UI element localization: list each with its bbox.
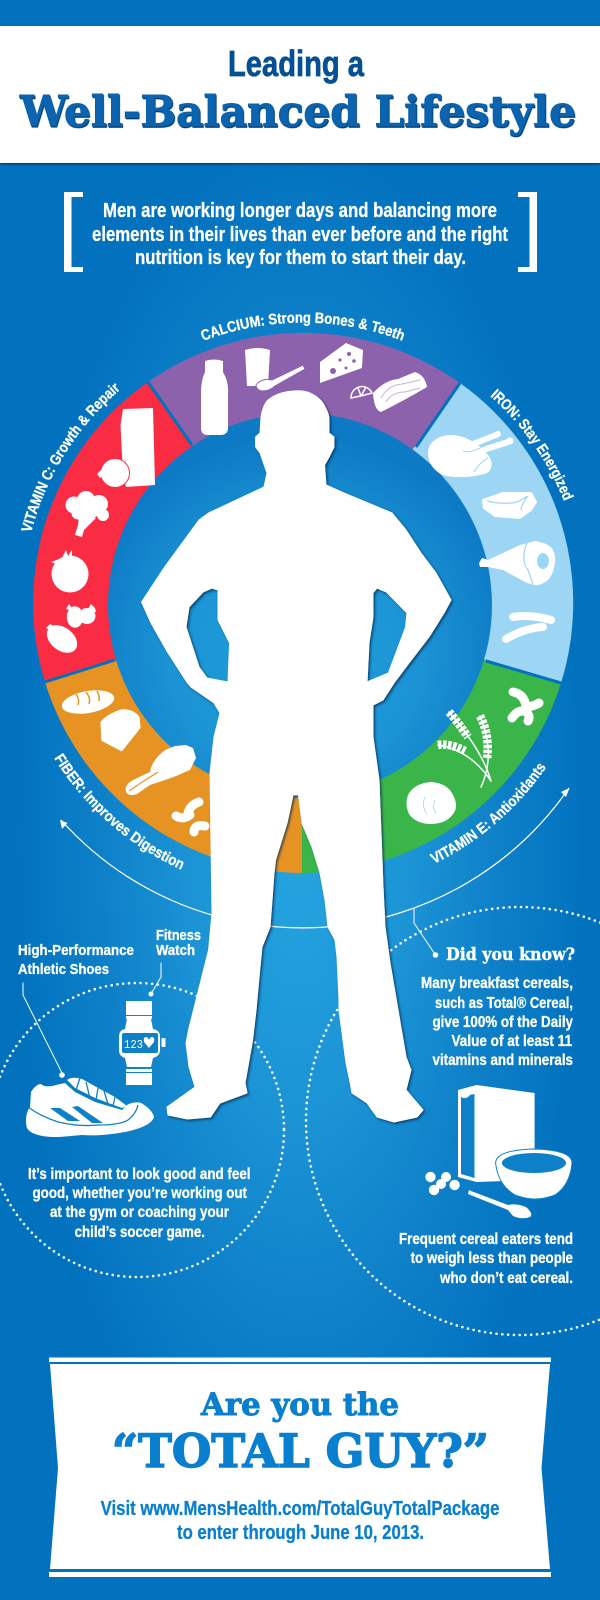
label: athletic shoes: High-Performance xyxy=(18,942,134,959)
left paragraph xyxy=(28,1166,250,1241)
dotted circle right xyxy=(306,907,600,1335)
left paragraph: It’s important to look good and feel xyxy=(28,1166,250,1183)
callout: athletic shoes xyxy=(18,942,154,1137)
leader line: watch xyxy=(151,963,161,994)
left paragraph: good, whether you’re working out xyxy=(32,1185,247,1202)
label: athletic shoes: Athletic Shoes xyxy=(18,961,109,978)
title line one: Leading a xyxy=(228,43,365,84)
icon: cheese xyxy=(320,343,363,383)
icon: baguette xyxy=(60,687,116,717)
intro text xyxy=(92,200,508,269)
left bracket xyxy=(64,192,83,272)
icons: vitamin C foods xyxy=(42,408,155,659)
title band xyxy=(0,26,600,163)
icon: strawberries xyxy=(42,604,96,659)
call to action text: to enter through June 10, 2013. xyxy=(177,1522,424,1544)
segment: iron xyxy=(303,383,573,683)
call to action text: Visit www.MensHealth.com/TotalGuyTotalPackage xyxy=(101,1498,499,1520)
icon: fish fillet xyxy=(373,372,427,412)
label: athletic shoes xyxy=(18,942,134,978)
fact text: give 100% of the Daily xyxy=(432,1014,573,1031)
icon: spoon xyxy=(468,1190,531,1218)
heading line one: Are you the xyxy=(200,1387,399,1423)
icons: vitamin E foods xyxy=(406,692,539,824)
heading: did you know: Did you know? xyxy=(446,945,575,964)
icon: broccoli xyxy=(66,491,109,537)
intro text: elements in their lives than ever before and the right xyxy=(92,224,508,246)
icon: wheat xyxy=(438,712,491,787)
icon: sausages xyxy=(506,616,551,639)
intro quote with brackets xyxy=(64,192,537,272)
fact text: Many breakfast cereals, xyxy=(421,975,573,992)
label: fitness watch xyxy=(156,927,201,959)
segment: calcium xyxy=(148,333,460,603)
call to action panel xyxy=(49,1358,551,1577)
inner disc xyxy=(108,413,492,797)
icon: cereal box xyxy=(458,1085,535,1182)
callout: fitness watch xyxy=(119,927,201,1085)
icons: calcium foods xyxy=(201,343,427,435)
icon: bread loaf xyxy=(100,709,141,752)
fact text xyxy=(421,975,573,1069)
label: iron: IRON: Stay Energized xyxy=(490,388,574,501)
icon: nuts xyxy=(176,802,205,832)
label: vitamin C: VITAMIN C: Growth & Repair xyxy=(20,383,119,530)
icon: spoon xyxy=(256,365,305,391)
label: vitamin E: VITAMIN E: Antioxidants xyxy=(429,764,546,863)
leader line xyxy=(414,908,436,955)
heading line two: “TOTAL GUY?” xyxy=(112,1424,489,1478)
icon: cabbage xyxy=(406,782,456,824)
fact text: such as Total® Cereal, xyxy=(435,995,573,1012)
icon: lime wedge xyxy=(351,387,372,398)
icons: fiber foods xyxy=(60,687,205,832)
icon: tomato xyxy=(51,550,88,592)
icon: glass xyxy=(245,348,270,386)
label: calcium: CALCIUM: Strong Bones & Teeth xyxy=(201,312,404,341)
icon: bowl xyxy=(496,1149,572,1199)
dotted circle left xyxy=(0,983,284,1277)
icon: shoe xyxy=(26,1078,154,1137)
icon: steak xyxy=(483,493,536,518)
label: fitness watch: Watch xyxy=(156,942,195,959)
icon: orange xyxy=(97,458,130,488)
label: fiber: FIBER: Improves Digestion xyxy=(54,753,184,870)
did you know callout xyxy=(399,908,575,1287)
icon: milk bottle xyxy=(201,360,228,435)
man silhouette xyxy=(142,391,451,1122)
closing text: to weigh less than people xyxy=(411,1250,573,1267)
segment: vitamin C xyxy=(33,382,303,682)
closing text: Frequent cereal eaters tend xyxy=(399,1231,573,1248)
icon: squash xyxy=(126,745,196,795)
left paragraph: child’s soccer game. xyxy=(75,1224,205,1241)
segment: fiber xyxy=(45,603,302,873)
icon: cereal pieces xyxy=(425,1172,460,1195)
arrow arc xyxy=(60,788,570,928)
icon: juice carton xyxy=(120,408,155,487)
icon: watch xyxy=(119,1001,166,1085)
fact text: Value of at least 11 xyxy=(452,1033,572,1050)
intro text: Men are working longer days and balancing more xyxy=(103,200,497,222)
icon: ham xyxy=(479,541,555,585)
fact text: vitamins and minerals xyxy=(432,1052,573,1069)
icons: iron foods xyxy=(428,431,555,639)
icon: nuts xyxy=(512,692,539,721)
nutrient ring xyxy=(33,333,573,873)
leader line: shoes xyxy=(23,983,62,1073)
icon: roast chicken xyxy=(428,431,514,477)
closing text: who don’t eat cereal. xyxy=(439,1270,573,1287)
left paragraph: at the gym or coaching your xyxy=(50,1204,229,1221)
label: fitness watch: Fitness xyxy=(156,927,201,944)
right bracket xyxy=(518,192,537,272)
intro text: nutrition is key for them to start their day. xyxy=(135,247,466,269)
icon: watch: 123 xyxy=(124,1038,143,1052)
segment: vitamin E xyxy=(302,603,561,873)
closing text xyxy=(399,1231,573,1287)
title line two: Well-Balanced Lifestyle xyxy=(19,87,576,136)
call to action text xyxy=(101,1498,499,1544)
